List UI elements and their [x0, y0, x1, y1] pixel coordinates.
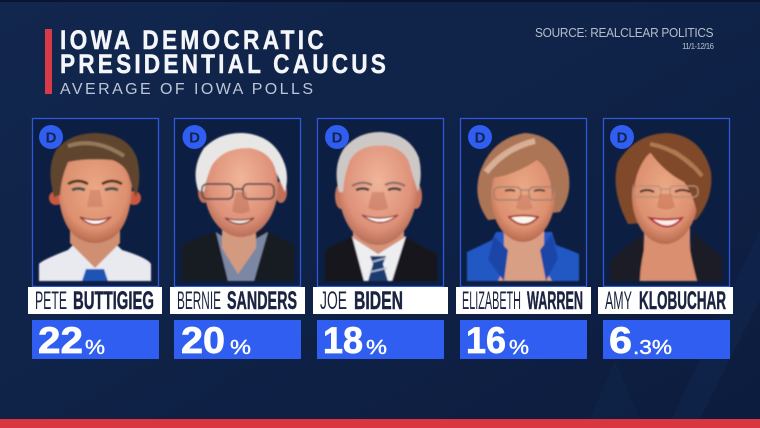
panel: Bernie Sanders [170, 118, 305, 361]
party badge [610, 125, 634, 149]
title: IOWA DEMOCRATIC [60, 25, 324, 55]
party badge [468, 125, 492, 149]
panel: Joe Biden [313, 118, 448, 361]
percentage bar: % [366, 337, 387, 359]
percentage bar: 18 [323, 320, 363, 361]
portrait frame [604, 118, 730, 286]
name label: ELIZABETH [462, 287, 521, 315]
name label: JOE [320, 287, 347, 315]
percentage bar [603, 320, 730, 361]
percentage bar: % [85, 337, 105, 359]
name label [28, 287, 162, 315]
party badge: D [332, 130, 343, 146]
title [60, 25, 386, 79]
name label: PETE [35, 287, 67, 315]
name label [313, 287, 448, 315]
portrait frame [460, 118, 586, 286]
name label: BUTTIGIEG [73, 287, 154, 315]
party badge [325, 125, 349, 149]
party badge: D [475, 130, 486, 146]
panel: Amy Klobuchar [598, 118, 733, 361]
percentage bar: 22 [38, 320, 83, 361]
source: 11/1-12/16 [682, 42, 715, 51]
source: SOURCE: REALCLEAR POLITICS [535, 26, 714, 40]
name label: BIDEN [354, 287, 403, 315]
portrait: Warren [467, 133, 579, 281]
percentage bar: 20 [181, 320, 225, 361]
source [535, 26, 715, 51]
title block [45, 25, 386, 98]
title: PRESIDENTIAL CAUCUS [60, 49, 386, 79]
percentage bar [460, 320, 587, 361]
party badge [39, 125, 63, 149]
percentage bar: % [230, 337, 251, 359]
party badge: D [46, 130, 57, 146]
name label: SANDERS [227, 287, 297, 315]
panel: Elizabeth Warren [456, 118, 591, 361]
percentage bar: % [509, 337, 529, 359]
subtitle: AVERAGE OF IOWA POLLS [60, 81, 313, 98]
percentage bar [317, 320, 444, 361]
portrait frame [32, 118, 158, 286]
percentage bar: 16 [466, 320, 506, 361]
party badge: D [189, 130, 200, 146]
bottom red band [0, 419, 760, 428]
name label: BERNIE [177, 287, 221, 315]
name label: WARREN [527, 287, 583, 315]
panel: Pete Buttigieg [28, 118, 162, 361]
portrait: Buttigieg [39, 133, 151, 281]
portrait frame [318, 118, 444, 286]
percentage bar: 6 [609, 320, 632, 361]
name label [598, 287, 733, 315]
portrait: Sanders [182, 133, 294, 281]
name label [170, 287, 305, 315]
percentage bar [174, 320, 301, 361]
name label: AMY [605, 287, 632, 315]
percentage bar: .3% [633, 337, 672, 359]
portrait: Biden [325, 132, 437, 281]
portrait frame [174, 118, 300, 286]
portrait: Klobuchar [610, 133, 722, 281]
party badge [182, 125, 206, 149]
red accent bar [45, 29, 52, 94]
percentage bar [32, 320, 159, 361]
party badge: D [617, 130, 628, 146]
